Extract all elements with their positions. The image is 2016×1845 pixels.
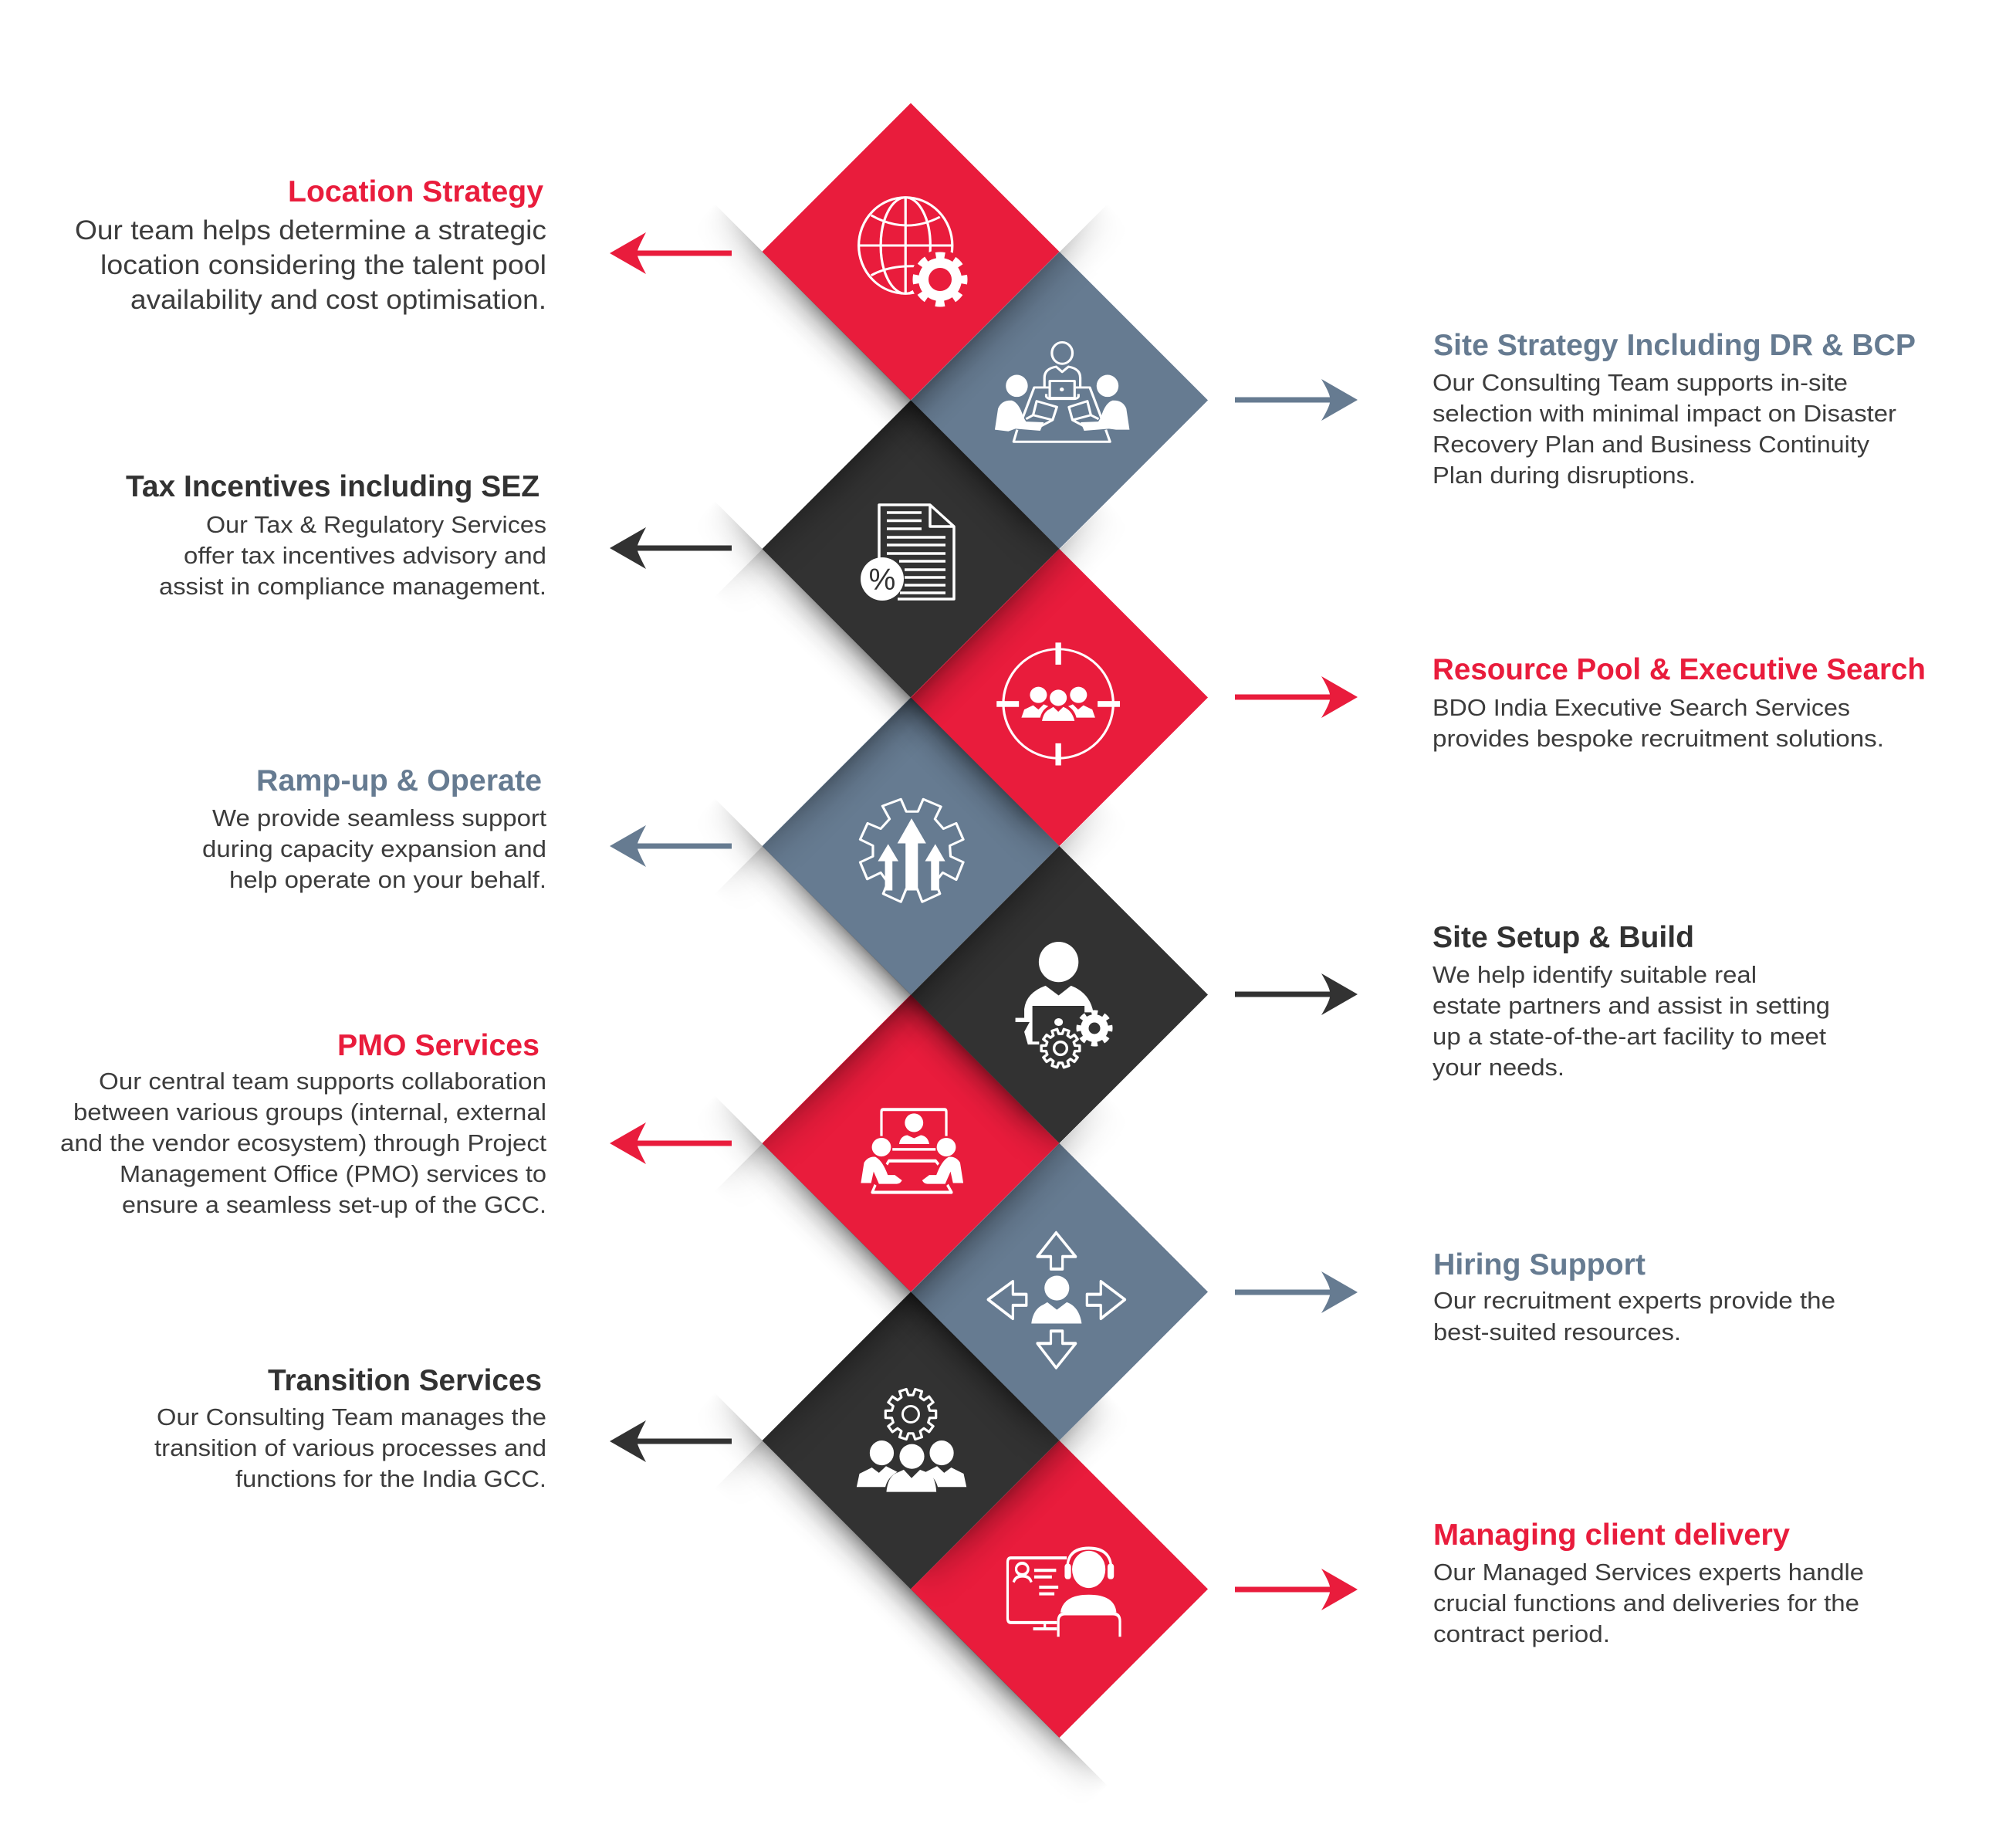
body: crucial functions and deliveries for the [1433,1589,1859,1616]
body [75,215,546,315]
body: offer tax incentives advisory and [184,542,546,569]
heading: Site Strategy Including DR & BCP [1433,329,1916,362]
diamond: Tax Incentives [763,400,1059,698]
body: availability and cost optimisation. [130,285,546,315]
diamond: PMO [763,994,1059,1292]
body: transition of various processes and [154,1434,546,1461]
text block: Managing client delivery [1433,1518,1864,1647]
diamond: Resource Pool [911,549,1208,846]
body: Our central team supports collaboration [99,1068,546,1095]
text block: Site Setup [1433,921,1830,1081]
arrow: Site Strategy [1235,379,1358,421]
arrow: Hiring Support [1235,1271,1358,1313]
body: provides bespoke recruitment solutions. [1433,725,1884,752]
body: selection with minimal impact on Disaster [1433,400,1896,427]
text block: Resource Pool [1433,653,1926,752]
heading: Tax Incentives including SEZ [126,470,540,503]
body: We provide seamless support [212,804,546,831]
text block: Ramp-up and Operate [202,764,546,893]
arrow: Tax Incentives [610,527,732,569]
text block: Hiring Support [1433,1248,1835,1346]
body: between various groups (internal, external [73,1099,546,1126]
icon: recruitment target [996,642,1120,765]
body: Our Consulting Team manages the [157,1403,546,1430]
body: help operate on your behalf. [229,866,546,893]
body: Recovery Plan and Business Continuity [1433,431,1870,458]
body [1433,961,1830,1081]
body: your needs. [1433,1054,1564,1081]
body: contract period. [1433,1620,1610,1647]
body: location considering the talent pool [100,250,546,280]
heading: Managing client delivery [1433,1518,1790,1552]
body [159,511,546,600]
icon: tax document with percent [861,505,954,601]
icon: team around a table [995,342,1129,442]
icon: PMO video meeting [861,1109,963,1193]
body [202,804,546,893]
body: and the vendor ecosystem) through Project [60,1129,546,1156]
heading: Resource Pool & Executive Search [1433,653,1926,686]
arrow: Location Strategy [610,232,732,274]
body: Our Tax & Regulatory Services [206,511,546,538]
icon: gear with upward arrows [860,799,963,902]
icon: tax document with percent: % [869,564,895,597]
body: up a state-of-the-art facility to meet [1433,1023,1826,1050]
body: best-suited resources. [1433,1319,1681,1346]
icon: gear above team [857,1390,966,1492]
arrow: Resource Pool [1235,676,1358,718]
shadows: diagonal fold shadows [684,204,1138,1816]
heading: PMO Services [337,1029,540,1062]
icon: headset agent at monitor [1007,1548,1120,1637]
body: Management Office (PMO) services to [120,1160,546,1187]
body: Plan during disruptions. [1433,462,1696,489]
body: assist in compliance management. [159,573,546,600]
arrow: Managing client delivery [1235,1569,1358,1610]
body [1433,1559,1864,1647]
diamond: Site Strategy [911,252,1208,549]
heading: Site Setup & Build [1433,921,1694,954]
diamond: Location Strategy [763,103,1059,400]
diamond: Ramp-up [763,698,1059,994]
body: Our Consulting Team supports in-site [1433,369,1848,396]
diamond: Transition [763,1292,1059,1589]
body: BDO India Executive Search Services [1433,694,1850,721]
body: We help identify suitable real [1433,961,1757,988]
body: functions for the India GCC. [235,1465,546,1492]
body [1433,694,1884,752]
body: estate partners and assist in setting [1433,992,1830,1019]
body: Our recruitment experts provide the [1433,1287,1835,1314]
heading: Location Strategy [288,175,543,208]
arrow: Transition [610,1420,732,1462]
arrow: Ramp-up [610,825,732,867]
panel: diamond column [763,103,1208,1738]
heading: Transition Services [268,1364,542,1397]
diamond: Managing client delivery [911,1440,1208,1738]
body: Our Managed Services experts handle [1433,1559,1864,1586]
icon: person with four arrows [988,1233,1125,1368]
arrow: Site Setup [1235,973,1358,1015]
text block: Tax Incentives [126,470,546,600]
body [154,1403,546,1492]
body [1433,1287,1835,1346]
body: during capacity expansion and [202,835,546,862]
body [60,1068,546,1218]
diamond: Site Setup [911,846,1208,1143]
body [1433,369,1896,489]
body: Our team helps determine a strategic [75,215,546,245]
diamond: Hiring Support [911,1143,1208,1440]
icon: person with laptop and gears [1016,942,1110,1068]
arrow: PMO [610,1122,732,1164]
heading: Hiring Support [1433,1248,1646,1281]
text block: Transition Services [154,1364,546,1492]
text block: Site Strategy [1433,329,1916,489]
body: ensure a seamless set-up of the GCC. [122,1191,546,1218]
heading: Ramp-up & Operate [256,764,542,797]
text block: PMO Services [60,1029,546,1218]
text block: Location Strategy [75,175,546,315]
icon: globe with gear [859,198,969,309]
